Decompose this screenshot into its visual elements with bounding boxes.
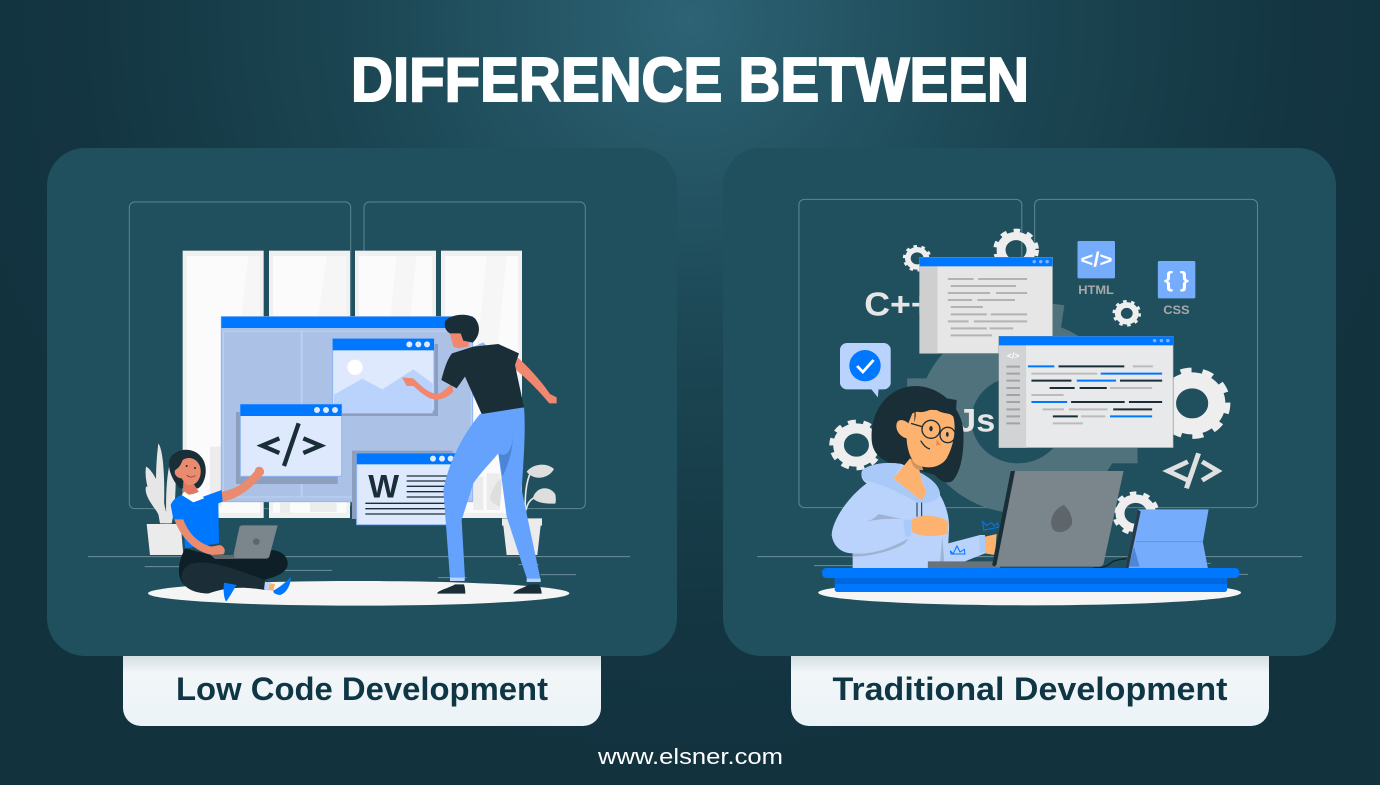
check speech bubble — [840, 343, 891, 397]
floor ellipse — [148, 581, 569, 606]
website url: www.elsner.com — [597, 744, 783, 769]
title: DIFFERENCE BETWEEN — [351, 46, 1029, 115]
plant left — [146, 443, 183, 555]
CSS icon: { } — [1164, 267, 1189, 292]
plant right — [490, 465, 556, 555]
label text: traditional: Traditional Development — [832, 671, 1228, 707]
illustration: traditional — [757, 199, 1302, 605]
HTML icon: </> — [1080, 248, 1112, 271]
girl with hoodie — [832, 386, 998, 568]
word document window: W — [368, 467, 399, 504]
label tab: traditional — [791, 650, 1269, 726]
laptop — [928, 471, 1124, 568]
back code window — [920, 257, 1052, 353]
CSS icon: CSS — [1163, 303, 1190, 317]
label tab: low code — [123, 650, 601, 726]
gears — [832, 231, 1226, 533]
illustration: low code — [88, 202, 630, 606]
Js label: Js — [957, 403, 995, 439]
code window — [236, 404, 342, 484]
blue desk — [822, 568, 1239, 592]
floor line — [88, 557, 630, 578]
CSS icon — [1158, 261, 1195, 317]
C++ label: C++ — [864, 286, 932, 323]
man pointing — [402, 315, 557, 594]
label text: low code: Low Code Development — [176, 671, 548, 707]
panel: low code development — [47, 148, 677, 656]
tablet — [1125, 509, 1209, 568]
large browser window — [221, 317, 473, 502]
HTML icon — [1077, 241, 1115, 297]
panel: traditional development — [723, 148, 1336, 656]
front code window: </> — [1007, 351, 1020, 361]
image window — [333, 339, 438, 416]
woman with laptop — [169, 450, 291, 602]
floor ellipse — [818, 580, 1241, 605]
cable — [1093, 558, 1127, 568]
HTML icon: HTML — [1078, 283, 1114, 297]
word document window — [352, 451, 457, 525]
floor line — [757, 557, 1302, 574]
front code window — [999, 336, 1173, 448]
windows backdrop — [183, 251, 522, 518]
code symbol — [1168, 453, 1218, 488]
big background gear — [907, 302, 1137, 513]
